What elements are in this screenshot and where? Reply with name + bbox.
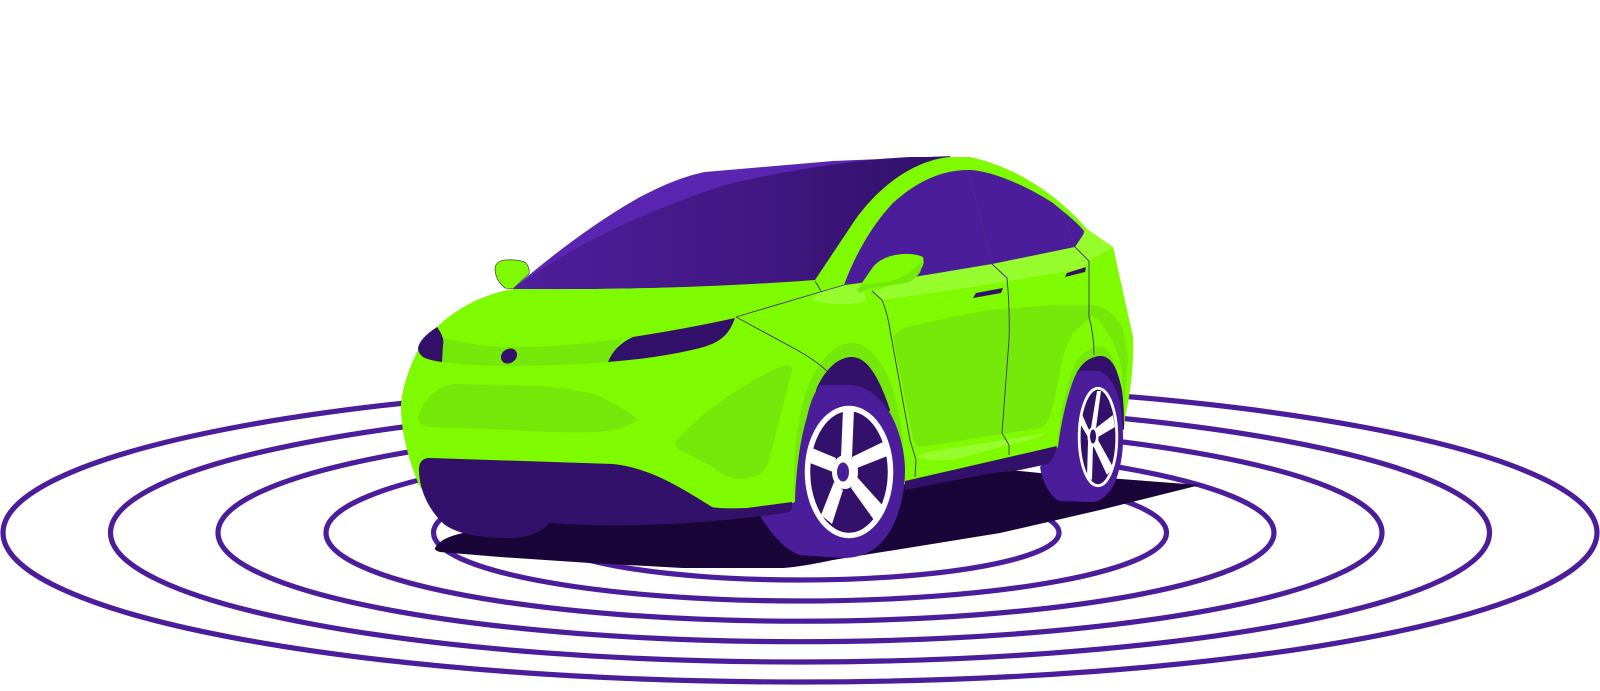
rear wheel arch halo: [1058, 347, 1125, 450]
left mirror: [495, 260, 529, 289]
sill highlight: [917, 433, 1047, 461]
front spokes: [810, 409, 890, 524]
rear rim: [1079, 388, 1117, 486]
front sensor dot: [498, 345, 520, 367]
side window: [844, 170, 1084, 285]
front hub: [837, 462, 849, 482]
front rim: [808, 408, 890, 536]
front door handle: [973, 288, 1003, 298]
front bumper dark: [419, 458, 792, 538]
front wheel arch: [816, 357, 890, 430]
rear hub: [1090, 430, 1096, 444]
outside mirror: [857, 254, 924, 293]
panel seams: [736, 170, 1094, 477]
rocker sill: [905, 446, 1057, 490]
belt line highlight: [872, 229, 1113, 300]
rear fender bright area: [1035, 316, 1125, 450]
front rim face: [808, 408, 890, 536]
rear door handle: [1065, 267, 1086, 277]
car: [401, 156, 1133, 558]
left headlight: [418, 327, 443, 362]
car shadow: [435, 470, 1200, 568]
front wheel arch halo: [794, 343, 905, 510]
mirror shade: [857, 262, 922, 293]
grille shade: [418, 384, 638, 432]
rear tyre: [1040, 371, 1123, 502]
windshield: [513, 156, 960, 289]
rear rim face: [1079, 388, 1117, 486]
windshield dark glass: [513, 157, 950, 289]
concentric signal rings: [3, 383, 1597, 682]
rear wheel arch: [1072, 356, 1124, 430]
front fascia shade: [442, 338, 623, 366]
front tyre: [760, 385, 905, 558]
fender shade: [675, 366, 792, 479]
car body: [401, 157, 1133, 512]
rear spokes: [1079, 391, 1115, 480]
hood highlight: [812, 284, 866, 304]
right headlight: [608, 318, 735, 362]
door panel shade: [893, 305, 1128, 447]
